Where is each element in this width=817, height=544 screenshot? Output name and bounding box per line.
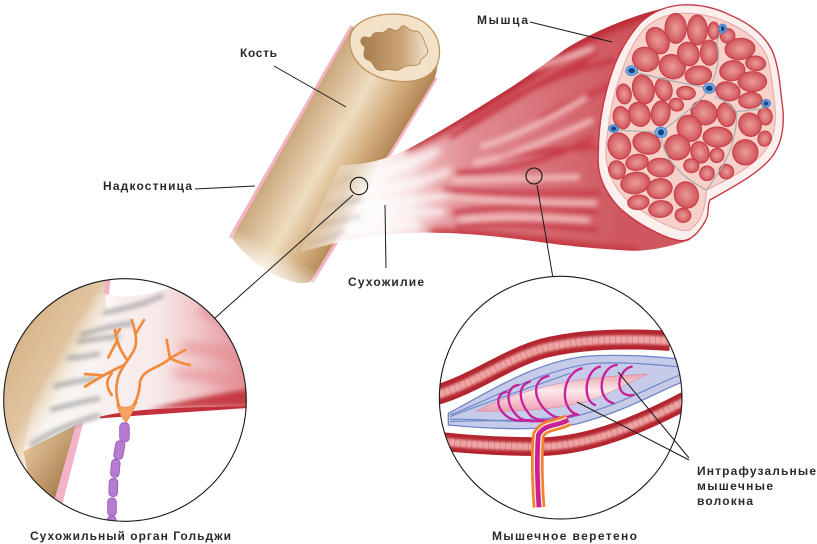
bone xyxy=(230,14,440,283)
label: muscle spindle: Мышечное веретено xyxy=(492,529,637,543)
extrafusal fibre: bottom xyxy=(443,398,690,447)
label: intrafusal muscle fibres: волокна xyxy=(697,494,753,508)
inner connective tissue xyxy=(606,13,775,230)
inset: muscle spindle xyxy=(438,276,682,520)
sensory nerve xyxy=(537,420,568,507)
leader lines: intrafusal fibres xyxy=(577,372,689,460)
label: Golgi tendon organ: Сухожильный орган Гольджи xyxy=(30,529,231,543)
outer sheath xyxy=(598,5,783,241)
muscle fibres xyxy=(312,8,662,251)
orange nerve ending xyxy=(85,320,190,417)
label: bone: Кость xyxy=(240,46,277,60)
tendon in inset xyxy=(23,287,253,452)
extrafusal fibre: top xyxy=(433,339,670,396)
muscle bundles xyxy=(605,13,774,224)
annulospiral coil xyxy=(498,365,633,421)
grey tendon streaks xyxy=(30,295,163,445)
locator circle: muscle xyxy=(526,168,542,184)
label: tendon: Сухожилие xyxy=(348,275,424,289)
spindle capsule xyxy=(448,355,683,429)
label: intrafusal muscle fibres: Интрафузальные xyxy=(697,464,816,478)
muscle cross-section xyxy=(598,5,783,241)
septa xyxy=(614,29,766,190)
inset: Golgi tendon organ xyxy=(3,278,247,522)
afferent nerve fibre: bead chain xyxy=(107,423,129,529)
label: intrafusal muscle fibres xyxy=(697,464,816,508)
bone end xyxy=(350,14,440,82)
leader lines xyxy=(195,22,612,318)
label: muscle: Мышца xyxy=(477,13,528,27)
label: intrafusal muscle fibres: мышечные xyxy=(697,479,773,493)
bone in inset xyxy=(4,281,107,471)
blood vessels xyxy=(609,24,771,138)
intrafusal fibre xyxy=(476,374,647,411)
locator circle: tendon xyxy=(350,177,368,195)
label: periosteum: Надкостница xyxy=(103,179,192,193)
